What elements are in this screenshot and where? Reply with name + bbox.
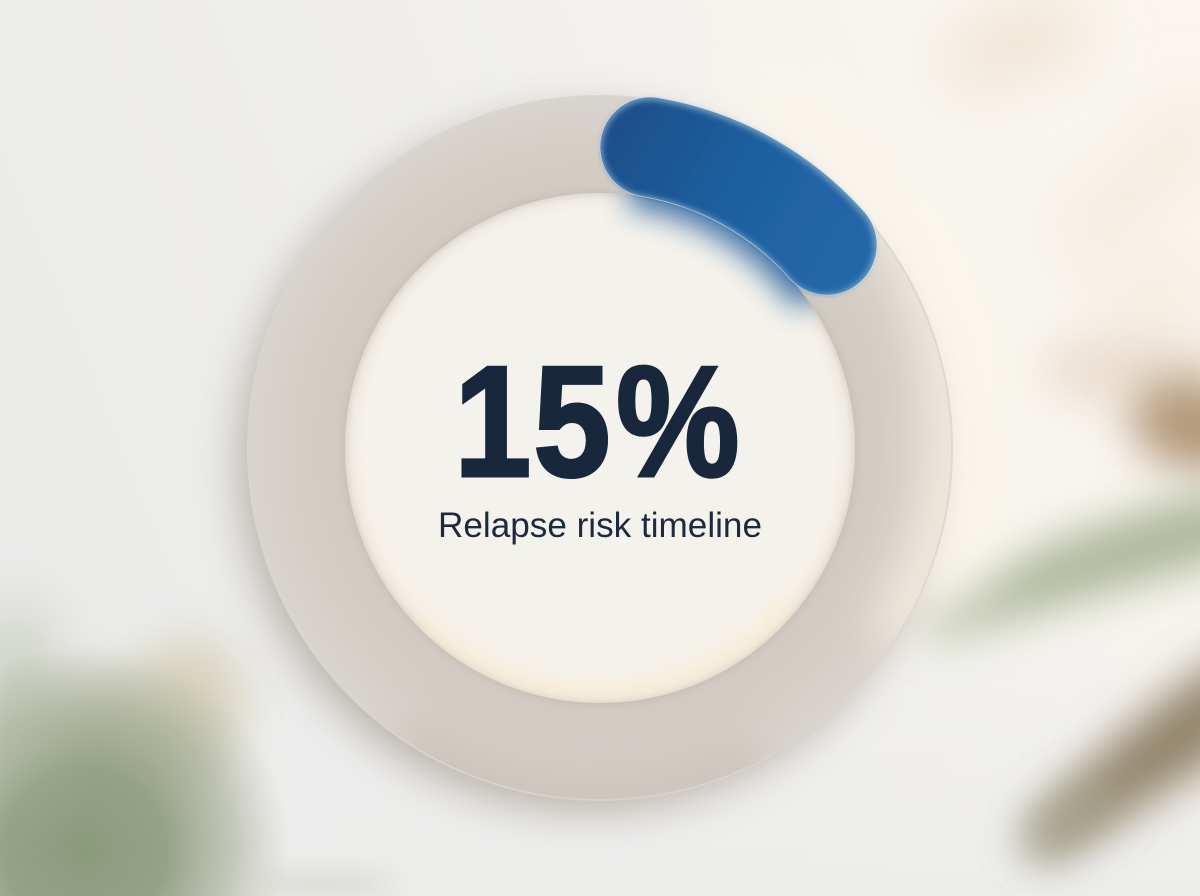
blurred foliage: right tan leaf [1040, 334, 1200, 484]
warm glow right of ring [740, 90, 975, 610]
blurred foliage: bottom left green [0, 600, 400, 896]
progress ring track [247, 95, 953, 801]
ring drop shadow [240, 114, 936, 810]
progress arc: 15% blue segment [650, 147, 827, 246]
ring centre well [343, 190, 857, 705]
percentage value: 15% [454, 333, 740, 510]
blurred foliage: right green leaf [920, 485, 1200, 640]
caption: Relapse risk timeline [438, 506, 762, 545]
blurred foliage: top right warm [960, 30, 1200, 300]
blurred foliage: lower right brown leaf [1030, 645, 1200, 865]
